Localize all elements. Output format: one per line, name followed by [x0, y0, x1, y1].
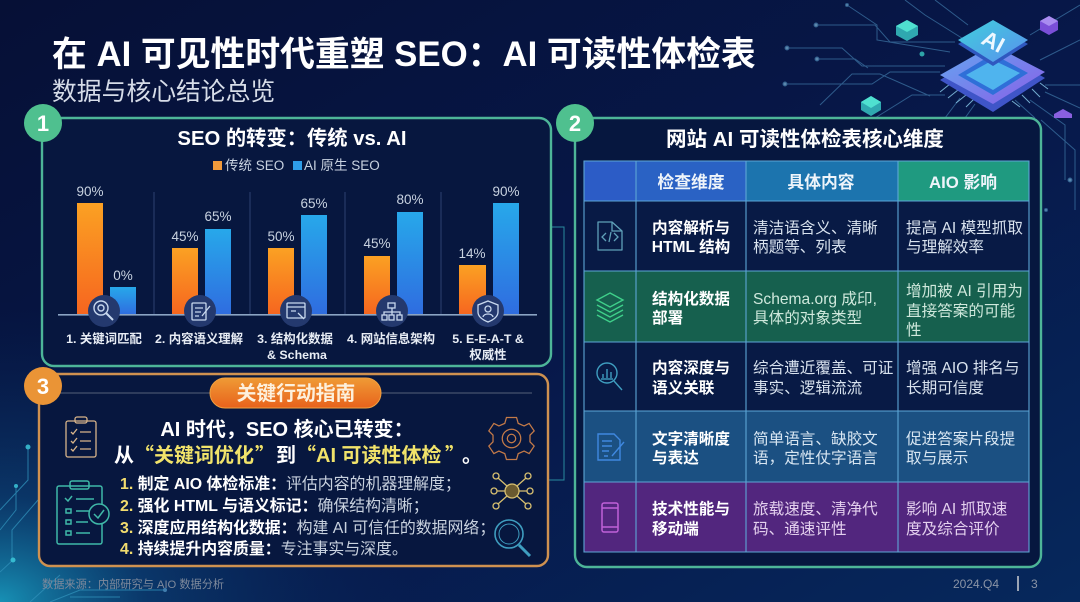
- axis labels: 权威性: [469, 347, 507, 362]
- table header: 检查维度: [657, 172, 725, 192]
- badge 3: 3: [37, 374, 49, 399]
- icon: small cube teal: [896, 20, 918, 41]
- axis labels: 1. 关键词匹配: [66, 331, 142, 346]
- row: performance: 旅载速度、清净代: [753, 500, 878, 518]
- row: text clarity: 促进答案片段提: [906, 430, 1016, 448]
- row: content depth: 内容深度与: [652, 358, 730, 377]
- bar chart: [58, 184, 537, 316]
- row: text clarity: 与表达: [652, 449, 699, 467]
- panel 1: SEO shift chart: [42, 118, 551, 366]
- row: structured data: 增加被 AI 引用为: [906, 282, 1023, 300]
- row: content depth: 综合遭近覆盖、可证: [753, 359, 893, 377]
- row: text clarity: 语，定性仗字语言: [753, 449, 878, 467]
- guide list: [120, 474, 495, 558]
- footer source: 数据来源：内部研究与 AIO 数据分析: [42, 577, 224, 591]
- chart legend: 传统 SEO: [225, 158, 284, 173]
- row: performance: 移动端: [652, 520, 699, 538]
- row: content depth: 事实、逻辑流流: [753, 379, 863, 397]
- bar chart: 0%: [113, 268, 133, 283]
- panel 3: action guide: [39, 374, 548, 566]
- icon: layers: [597, 293, 623, 322]
- icon: clipboard check: [57, 481, 109, 544]
- icon: shield: [472, 295, 504, 327]
- row: content parsing: 提高 AI 模型抓取: [906, 219, 1023, 237]
- guide list: 2. 强化 HTML 与语义标记：确保结构清晰；: [120, 496, 429, 515]
- row: content depth: 长期可信度: [906, 379, 984, 397]
- guide headline: 到: [276, 444, 296, 467]
- row: performance: 影响 AI 抓取速: [906, 500, 1007, 518]
- row: performance: 度及综合评价: [906, 520, 1000, 538]
- badge 2: 2: [569, 111, 581, 136]
- guide headline: 从: [114, 445, 134, 467]
- row: structured data: 性: [906, 321, 922, 339]
- footer date and page: [953, 576, 1038, 591]
- guide headline: “: [134, 439, 154, 468]
- icon: smartphone: [602, 503, 618, 532]
- axis labels: & Schema: [267, 348, 327, 362]
- row: performance: 码、通速评性: [753, 520, 847, 538]
- bar chart: 45%: [363, 236, 391, 251]
- bar chart: 65%: [300, 196, 328, 211]
- guide headline: AI 时代，SEO 核心已转变：: [160, 417, 414, 441]
- badge 1: 1: [37, 111, 49, 136]
- icon: small cube purple lower: [1054, 109, 1072, 118]
- row: performance: [652, 499, 1007, 538]
- circuit decoration: top right: [783, 0, 1080, 212]
- guide headline: ”: [445, 439, 465, 468]
- guide headline: 。: [462, 439, 482, 468]
- row: structured data: 结构化数据: [652, 289, 730, 308]
- axis labels: 3. 结构化数据: [257, 331, 333, 346]
- bar chart: 90%: [76, 184, 104, 199]
- badge 3: [24, 367, 62, 405]
- icon: data magnifier: [597, 363, 622, 390]
- axis labels: 4. 网站信息架构: [347, 331, 435, 346]
- circuit decoration: bottom left: [0, 444, 167, 602]
- connector between panels: [548, 227, 564, 480]
- table header: 具体内容: [787, 172, 855, 192]
- row: structured data: 部署: [652, 308, 683, 327]
- guide headline: AI 可读性体检: [316, 443, 442, 467]
- panel 2: checklist table: [575, 118, 1041, 567]
- badge 2: [556, 104, 594, 142]
- icon: checklist: [66, 417, 96, 457]
- icon: magnifier: [495, 520, 530, 556]
- row: content parsing: 内容解析与: [652, 218, 730, 237]
- icon: small cube teal lower: [861, 96, 881, 116]
- row: content parsing: [652, 218, 1023, 256]
- bar chart: 50%: [267, 229, 295, 244]
- guide headline: 关键词优化: [154, 444, 254, 467]
- icon: structured data: [280, 295, 312, 327]
- footer date and page: 2024.Q4: [953, 577, 999, 591]
- row: content parsing: 与理解效率: [906, 238, 984, 256]
- bar chart: 80%: [396, 192, 424, 207]
- table: [584, 161, 1029, 552]
- panel 2 heading: 网站 AI 可读性体检表核心维度: [666, 127, 944, 151]
- row: text clarity: 简单语言、缺胶文: [753, 430, 878, 448]
- guide pill: [210, 378, 381, 408]
- table header: [657, 172, 997, 192]
- bar chart: 45%: [171, 229, 199, 244]
- guide pill: 关键行动指南: [237, 383, 355, 405]
- row: performance: 技术性能与: [652, 499, 730, 518]
- row: text clarity: [652, 429, 1016, 467]
- row: structured data: [652, 282, 1023, 339]
- guide headline: ”: [255, 439, 275, 468]
- row: text clarity: 文字清晰度: [652, 429, 730, 448]
- icon: gear: [489, 418, 534, 460]
- icon: keyword search: [88, 295, 120, 327]
- chart legend: [213, 158, 380, 173]
- icon: document edit: [184, 295, 216, 327]
- row: content depth: 增强 AIO 排名与: [906, 359, 1020, 377]
- icon: edit document: [598, 434, 624, 460]
- guide list: 3. 深度应用结构化数据：构建 AI 可信任的数据网络；: [120, 518, 495, 537]
- footer date and page: 3: [1031, 577, 1038, 591]
- table row fills: [584, 161, 1029, 552]
- row: content depth: [652, 358, 1020, 397]
- row: content depth: 语义关联: [652, 379, 715, 397]
- row: structured data: 具体的对象类型: [753, 309, 862, 327]
- icon: site architecture: [376, 295, 408, 327]
- badge 1: [24, 104, 62, 142]
- guide headline: “: [296, 439, 316, 468]
- bar chart: 65%: [204, 209, 232, 224]
- guide list: 1. 制定 AIO 体检标准：评估内容的机器理解度；: [120, 474, 461, 493]
- bar chart: 14%: [458, 246, 486, 261]
- axis labels: 5. E-E-A-T &: [452, 332, 524, 346]
- guide headline: [114, 417, 482, 468]
- panel 1 heading: SEO 的转变：传统 vs. AI: [177, 126, 407, 150]
- icon: code file: [598, 222, 622, 250]
- axis labels: 2. 内容语义理解: [155, 331, 243, 346]
- row: structured data: Schema.org 成印,: [753, 290, 877, 308]
- row: content parsing: 柄题等、列表: [753, 238, 847, 256]
- row: text clarity: 取与展示: [906, 449, 968, 467]
- row: structured data: 直接答案的可能: [906, 302, 1016, 320]
- guide list: 4. 持续提升内容质量：专注事实与深度。: [120, 539, 408, 558]
- icon: AI chip: [940, 20, 1048, 112]
- row: content parsing: HTML 结构: [652, 238, 730, 256]
- icon: AI chip: AI: [978, 25, 1009, 58]
- chart legend: AI 原生 SEO: [304, 158, 380, 173]
- bar chart: 90%: [492, 184, 520, 199]
- axis labels: [66, 331, 524, 362]
- table header: AIO 影响: [929, 173, 997, 192]
- icon: data network: [491, 473, 533, 509]
- title: 在 AI 可见性时代重塑 SEO：AI 可读性体检表: [52, 35, 756, 74]
- icon: small cube purple: [1040, 16, 1058, 35]
- subtitle: 数据与核心结论总览: [52, 78, 275, 106]
- row: content parsing: 清洁语含义、清晰: [753, 219, 878, 237]
